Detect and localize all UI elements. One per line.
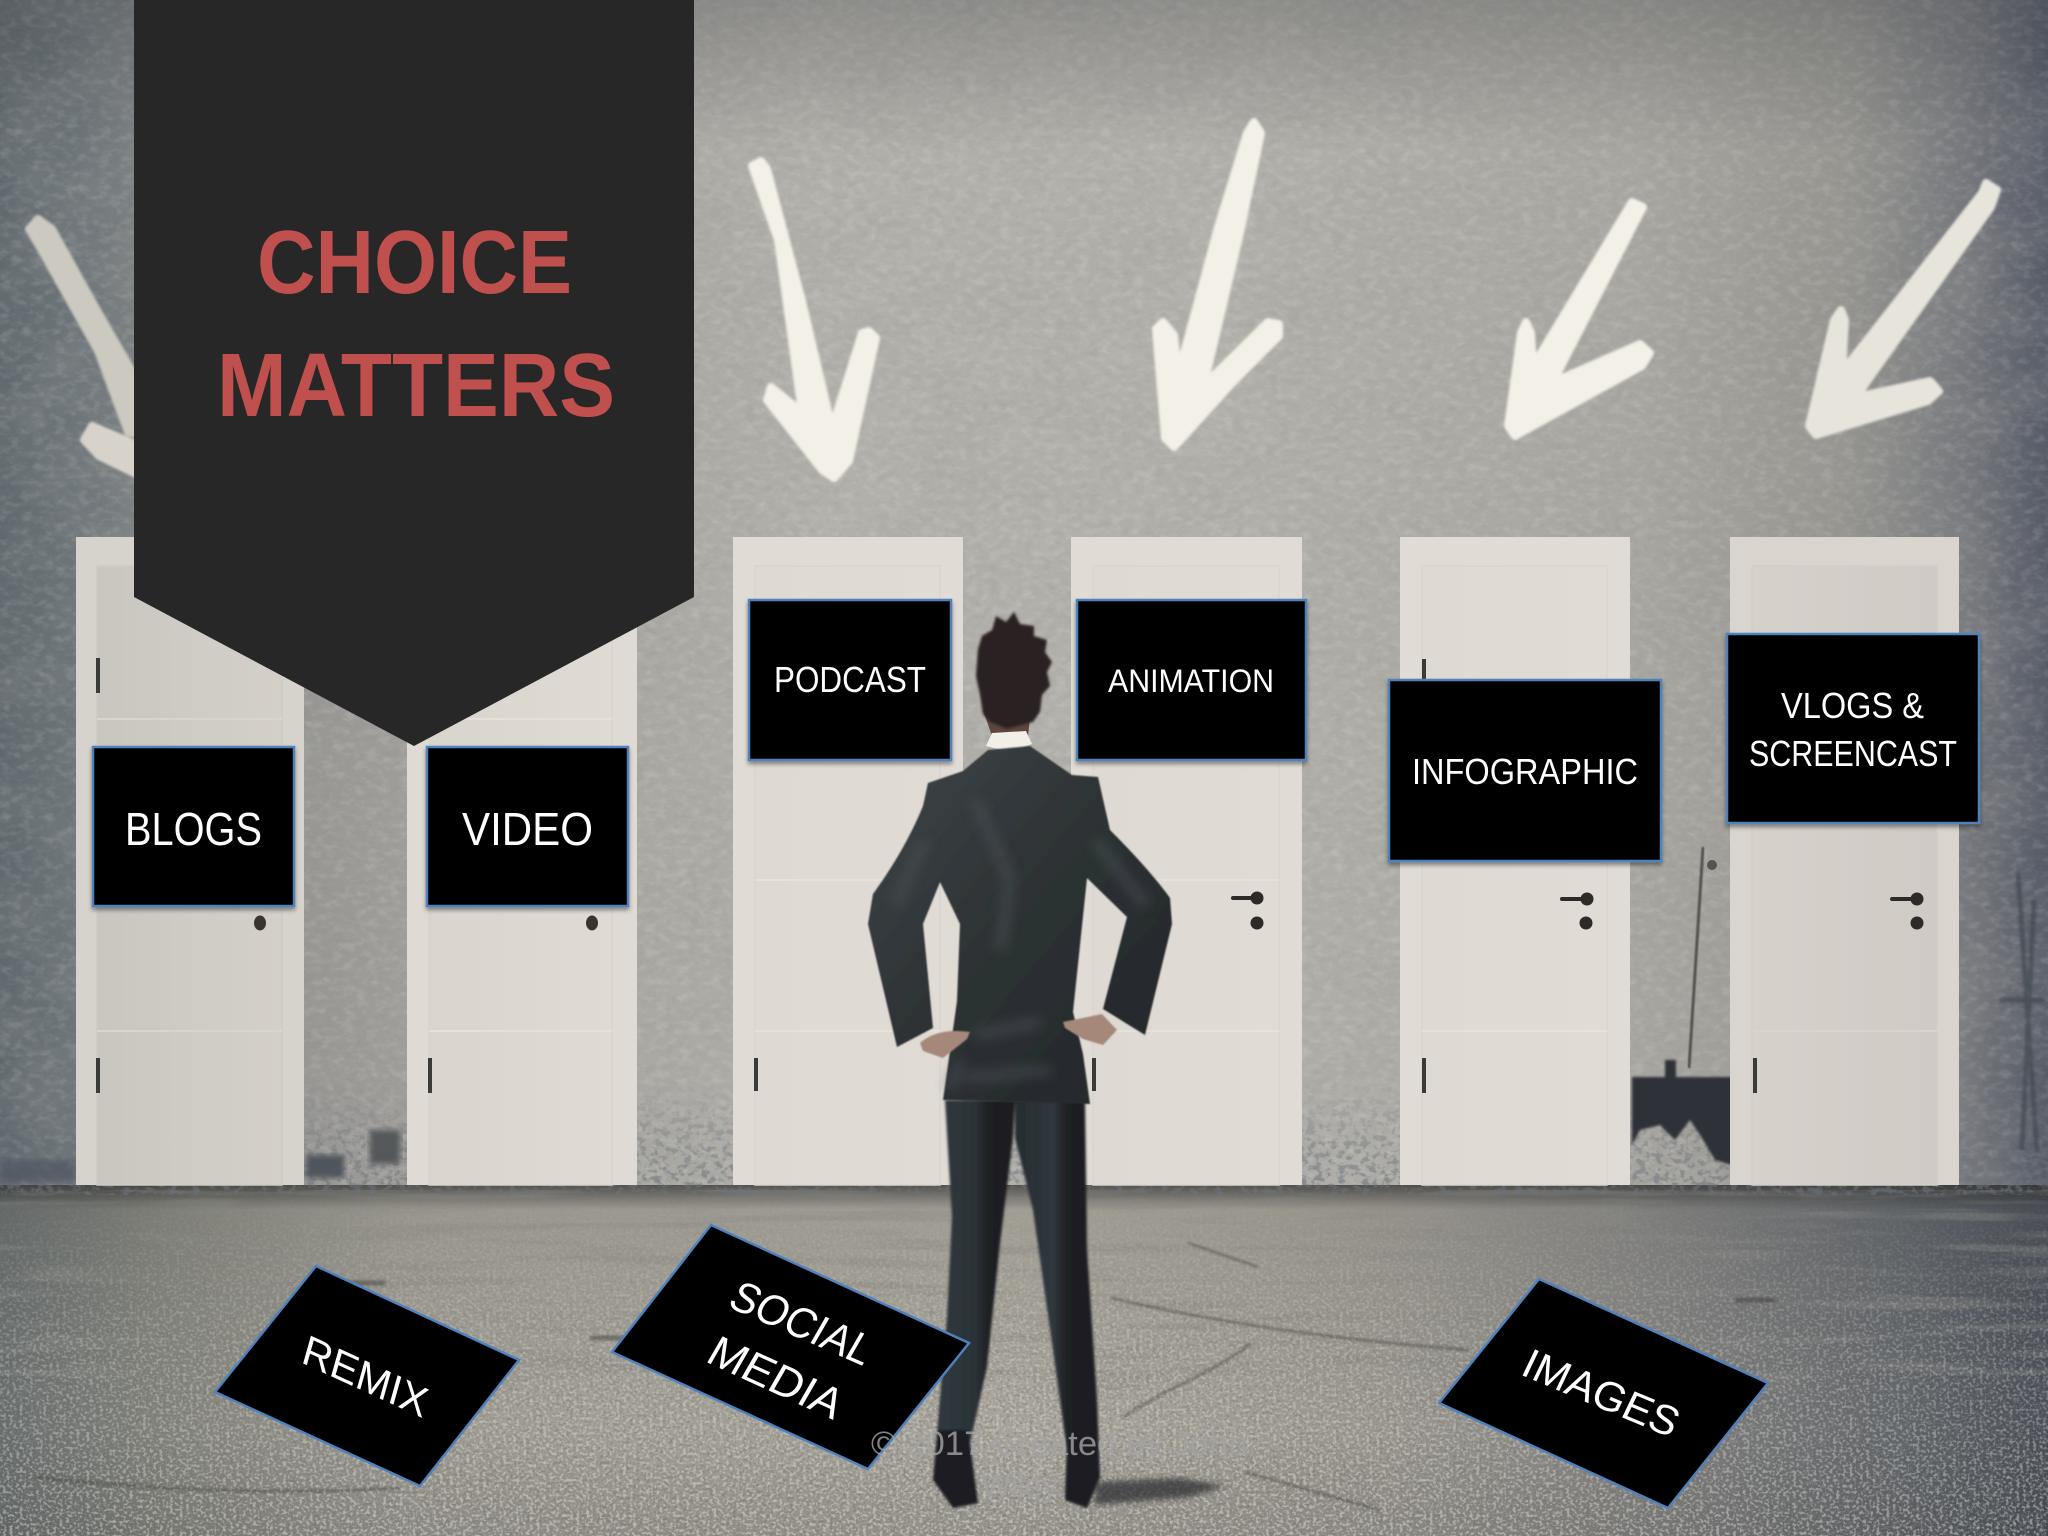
jacket highlights — [895, 800, 1145, 1090]
label: podcast — [749, 600, 951, 760]
label: images, tilted on the ground: IMAGES — [1515, 1340, 1687, 1446]
wall texture — [0, 0, 2048, 1190]
label: social media, tilted on the ground: MEDIA — [699, 1327, 853, 1429]
arrow 4 — [1508, 202, 1650, 436]
door 4 — [1071, 537, 1302, 1185]
neck — [983, 710, 1030, 736]
title: CHOICE — [257, 213, 572, 313]
man seen from behind — [868, 612, 1226, 1508]
faint footer credit — [871, 1425, 1248, 1505]
hair — [976, 612, 1052, 729]
label: blogs: BLOGS — [125, 803, 262, 855]
label: infographic — [1389, 680, 1661, 861]
door 2 — [407, 537, 637, 1185]
door 5 — [1400, 537, 1630, 1185]
hands — [920, 1014, 1117, 1058]
label: video — [427, 747, 628, 906]
door 1 — [76, 537, 304, 1185]
label: remix, tilted on the ground: REMIX — [298, 1325, 433, 1427]
label: video: VIDEO — [462, 803, 593, 855]
label: images, tilted on the ground — [1439, 1279, 1768, 1508]
white collar — [986, 731, 1032, 752]
arrow 1, partly behind the banner — [29, 219, 140, 476]
label: podcast: PODCAST — [774, 659, 926, 700]
label: remix, tilted on the ground — [215, 1266, 519, 1486]
ground cracks and marks — [36, 1243, 1775, 1510]
arrow 2 — [752, 161, 876, 478]
label: vlogs and screencast: SCREENCAST — [1749, 733, 1957, 774]
label: social media, tilted on the ground: SOCIAL — [721, 1272, 883, 1375]
background: asphalt ground — [0, 1185, 2048, 1536]
ground texture — [0, 1185, 2048, 1536]
label: blogs — [93, 747, 294, 906]
label: vlogs and screencast: VLOGS & — [1781, 685, 1924, 726]
door 3 — [733, 537, 963, 1185]
faint footer credit: Wiley. — [981, 1467, 1064, 1505]
jacket — [868, 746, 1172, 1104]
ground shadow — [1095, 1478, 1226, 1505]
label: social media, tilted on the ground — [612, 1225, 969, 1469]
wall grime at the door bases — [0, 847, 2048, 1195]
label: infographic: INFOGRAPHIC — [1412, 751, 1638, 792]
arrow 3 — [1156, 122, 1279, 447]
label: animation — [1077, 600, 1306, 760]
background: grey concrete wall — [0, 0, 2048, 1190]
trousers and shoes — [933, 1100, 1100, 1508]
door 6 — [1730, 537, 1959, 1185]
arrow 5 — [1809, 183, 1997, 435]
label: animation: ANIMATION — [1108, 663, 1274, 699]
label: vlogs and screencast — [1727, 634, 1979, 823]
banner: Choice Matters: MATTERS — [217, 336, 615, 436]
banner: Choice Matters — [134, 0, 694, 746]
faint footer credit: © 2017 Created by John — [871, 1425, 1248, 1463]
